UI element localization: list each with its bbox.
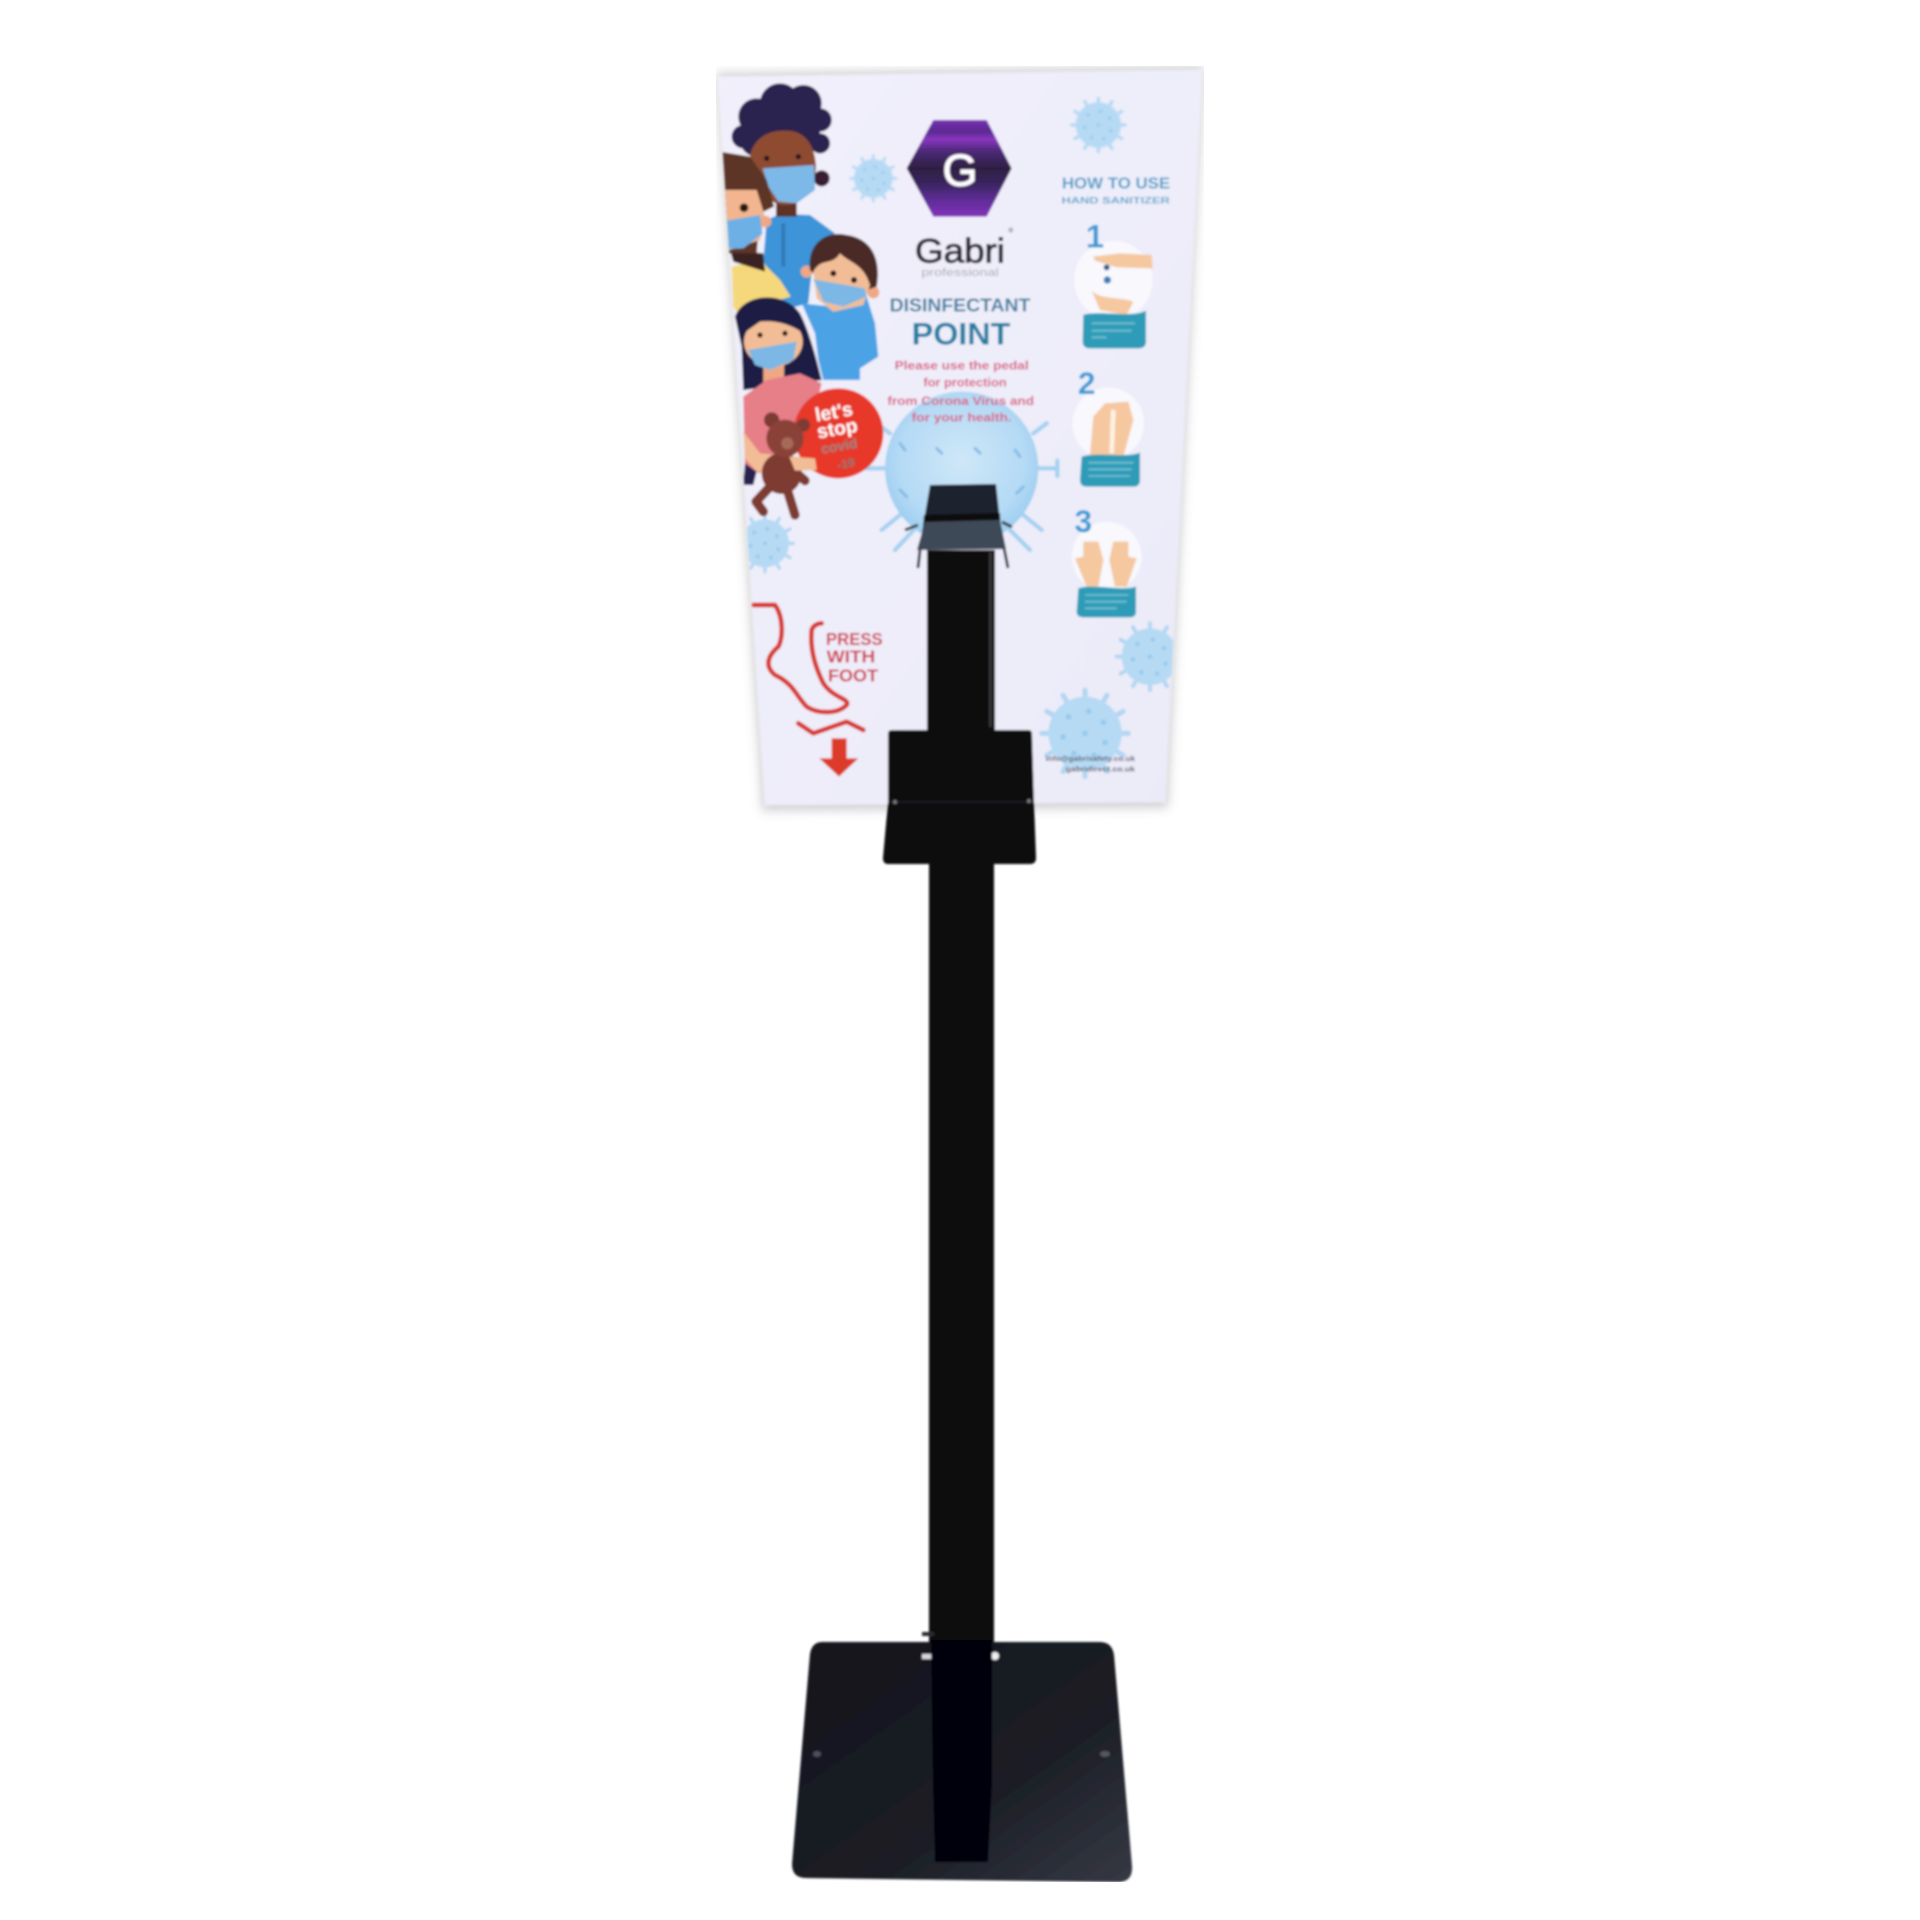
illustration: red let's stop covid badge: covid — [820, 435, 859, 457]
logo: purple hexagon G: G — [943, 146, 977, 195]
text block: press with foot: FOOT — [828, 666, 878, 686]
text block: press with foot — [826, 629, 883, 686]
text block: press with foot: WITH — [827, 647, 875, 667]
icon: red foot on pedal — [753, 605, 863, 733]
illustration: teddy bear — [756, 412, 817, 515]
icon: virus bottom right — [1042, 690, 1128, 777]
step 1: apply sanitizer: 1 — [1086, 217, 1104, 254]
step 3: clean hands — [1072, 503, 1142, 617]
logo: purple hexagon G — [907, 120, 1012, 217]
illustration: girl with pink shirt — [735, 297, 822, 485]
heading: how to use hand sanitizer: HOW TO USE — [1062, 175, 1171, 192]
text block: contact details: gabridirect.co.uk — [1066, 764, 1136, 773]
heading: how to use hand sanitizer: HAND SANITIZER — [1061, 196, 1170, 206]
stand: top bracket — [905, 484, 1012, 568]
illustration: woman with curly hair — [732, 83, 835, 310]
heading: disinfectant point — [890, 297, 1032, 346]
icon: red down arrow — [819, 738, 858, 777]
logo wordmark: Gabri professional: ® — [1008, 227, 1013, 235]
text block: press with foot: PRESS — [826, 629, 883, 649]
logo wordmark: Gabri professional — [915, 227, 1013, 279]
panel: disinfectant point poster — [718, 70, 1202, 805]
illustration: red let's stop covid badge: -19 — [836, 455, 856, 472]
step 2: rub hands: 2 — [1078, 365, 1095, 401]
stand: middle clamp box — [883, 730, 1036, 864]
text block: pedal instruction: Please use the pedal — [895, 359, 1029, 372]
illustration: red let's stop covid badge: stop — [815, 416, 859, 443]
text block: pedal instruction — [887, 359, 1034, 425]
logo wordmark: Gabri professional: Gabri — [915, 233, 1005, 271]
step 1: apply sanitizer — [1074, 217, 1153, 348]
icon: large virus — [866, 392, 1057, 550]
step 3: clean hands: 3 — [1075, 503, 1092, 539]
heading: disinfectant point: DISINFECTANT — [890, 294, 1030, 315]
text block: contact details: info@gabrisafety.co.uk — [1046, 754, 1136, 763]
stand: lower post — [929, 860, 994, 1650]
text block: pedal instruction: for your health. — [912, 412, 1012, 425]
illustration: red let's stop covid badge — [793, 388, 883, 478]
poster background — [718, 70, 1202, 805]
stand: pedal on base — [931, 1640, 992, 1862]
icon: virus lower left — [737, 515, 793, 572]
icon: virus lower right — [1117, 623, 1183, 690]
stand: upper post — [927, 550, 995, 740]
logo wordmark: Gabri professional: professional — [921, 267, 999, 279]
text block: pedal instruction: from Corona Virus and — [887, 395, 1034, 408]
illustration: person at left edge — [720, 152, 791, 312]
text block: pedal instruction: for protection — [923, 377, 1007, 390]
stand: base plate — [792, 1632, 1132, 1882]
heading: how to use hand sanitizer — [1061, 175, 1171, 206]
illustration: red let's stop covid badge: let's — [814, 399, 855, 427]
illustration: boy in blue shirt — [801, 234, 879, 380]
poster shadow — [716, 66, 1204, 811]
poster artwork — [720, 83, 1183, 777]
text block: contact details — [1046, 754, 1136, 773]
heading: disinfectant point: POINT — [912, 316, 1010, 351]
icon: virus near logo — [851, 156, 896, 201]
step 2: rub hands — [1072, 365, 1144, 487]
icon: virus top right — [1072, 98, 1125, 152]
product photo: sanitiser stand — [716, 66, 1204, 1882]
